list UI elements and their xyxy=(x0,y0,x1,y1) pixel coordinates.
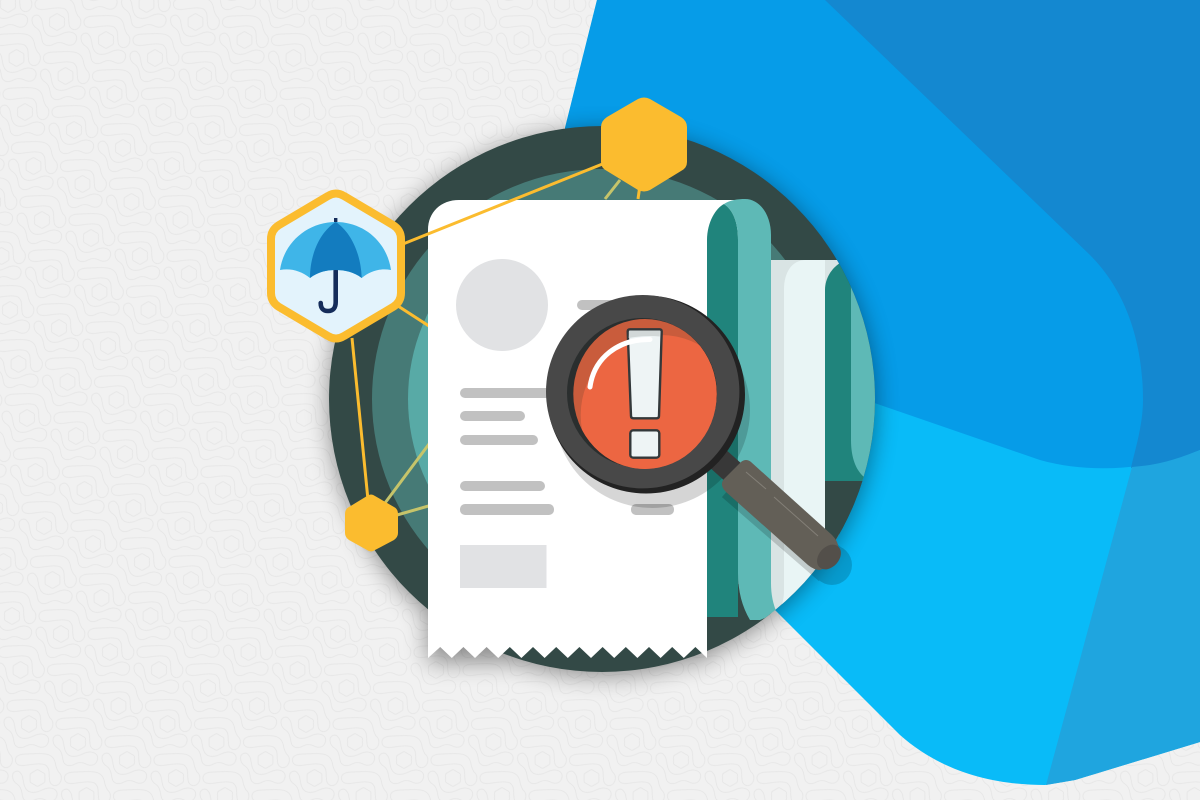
first receipt roll xyxy=(707,199,777,620)
drop shadow of disc and receipt xyxy=(329,130,875,676)
rim xyxy=(547,296,745,494)
neck xyxy=(716,457,735,474)
umbrella badge xyxy=(271,194,401,338)
top hexagon node xyxy=(601,98,687,192)
lens xyxy=(567,318,717,468)
hexagon frame xyxy=(271,194,401,338)
avatar placeholder xyxy=(456,259,548,351)
stamp placeholder xyxy=(460,545,546,588)
blue abstract background shape xyxy=(565,0,1200,785)
network connector lines behind receipt xyxy=(352,180,640,515)
handle xyxy=(722,460,838,570)
text placeholder lines xyxy=(460,300,674,515)
second receipt roll xyxy=(771,260,875,614)
lens highlight xyxy=(590,339,650,387)
magnifier shadow xyxy=(554,312,852,585)
magnifying glass xyxy=(546,295,846,574)
exclamation mark xyxy=(628,329,662,458)
concentric disc xyxy=(329,126,875,672)
small hexagon node xyxy=(345,494,398,552)
icon: umbrella xyxy=(280,218,391,311)
receipt paper xyxy=(428,200,745,658)
connector line crossing receipt xyxy=(403,163,605,244)
